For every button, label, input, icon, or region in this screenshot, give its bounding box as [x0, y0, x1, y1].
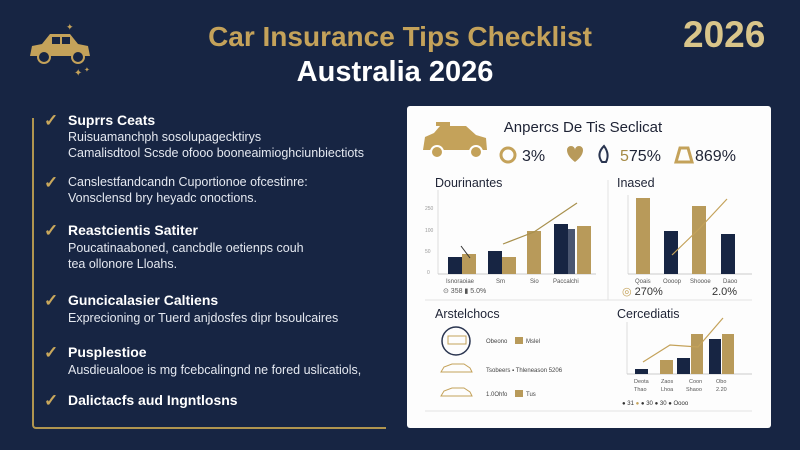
chart: left top bars: 50: [425, 249, 431, 255]
chart: right top bars: ◎ 270%: [622, 286, 663, 298]
checklist: Camalisdtool Scsde ofooo booneaimioghciunbiectiots: [68, 146, 364, 160]
chart: left top bars: Sio: [530, 279, 539, 285]
panel heading: Anpercs De Tis Seclicat: [504, 119, 663, 136]
chart: bottom right bars: Shaoo: [686, 387, 702, 393]
checklist: Dalictacfs aud Ingntlosns: [68, 392, 238, 408]
chart: right top bars: 2.0%: [712, 286, 737, 298]
chart: bottom right bars: Deota: [634, 379, 650, 385]
chart: right top bars: [617, 176, 752, 298]
chart: left top bars: [425, 176, 596, 295]
legend list: bottom left: Tus: [526, 392, 536, 398]
title: Australia 2026: [297, 56, 493, 88]
checklist: Vonsclensd bry heyadc onoctions.: [68, 191, 257, 205]
chart: left top bars: Dourinantes: [435, 176, 502, 190]
checklist: ✓: [44, 111, 58, 130]
checklist: [44, 111, 364, 410]
stats row: 3%: [522, 148, 545, 165]
legend list: bottom left: Tsobeers ▪ Thleneason 5206: [486, 368, 563, 374]
checklist: Pusplestioe: [68, 344, 147, 360]
checklist: Suprrs Ceats: [68, 112, 155, 128]
title: [208, 21, 592, 88]
chart: left top bars: 250: [425, 206, 434, 212]
item 1: [44, 111, 364, 160]
item 3: [44, 221, 304, 271]
checklist: Poucatinaaboned, cancbdle oetienps couh: [68, 241, 304, 255]
chart: right top bars: Oooop: [663, 279, 682, 285]
checklist: Exprecioning or Tuerd anjdosfes dipr bsoulcaires: [68, 311, 338, 325]
legend list: bottom left: 1.0Ohfo: [486, 392, 508, 398]
legend list: bottom left: Obeono: [486, 339, 508, 345]
item 6: [44, 391, 238, 410]
legend list: bottom left: [435, 307, 563, 398]
chart: left top bars: 0: [427, 270, 430, 276]
chart: left top bars: 100: [425, 228, 434, 234]
icon: gold car logo: [30, 22, 90, 78]
chart: right top bars: Inased: [617, 176, 655, 190]
checklist: Reastcientis Satiter: [68, 222, 198, 238]
chart: left top bars: Sm: [496, 279, 505, 285]
checklist: Ausdieualooe is mg fcebcalingnd ne fored uslicatiols,: [68, 363, 361, 377]
checklist: ✓: [44, 343, 58, 362]
checklist: Canslestfandcandn Cuportionoe ofcestinre:: [68, 175, 308, 189]
chart: bottom right bars: Cercediatis: [617, 307, 680, 321]
year badge: 2026: [683, 14, 765, 55]
stats row: 575%: [620, 148, 661, 165]
chart: bottom right bars: ● 31 ● ● 30 ● 30 ● Oooo: [622, 401, 689, 407]
chart: bottom right bars: Thao: [634, 387, 647, 393]
item 5: [44, 343, 361, 377]
checklist: ✓: [44, 291, 58, 310]
chart: bottom right bars: Lhoa: [661, 387, 674, 393]
chart: bottom right bars: Zaos: [661, 379, 673, 385]
checklist bracket: [32, 118, 386, 429]
legend list: bottom left: Mslel: [526, 339, 540, 345]
icon: gold car logo: ✦: [84, 66, 90, 74]
chart: left top bars: Isnoraoiae: [446, 279, 475, 285]
checklist: Ruisuamanchph sosolupagecktirys: [68, 130, 261, 144]
stats row: 869%: [695, 148, 736, 165]
chart: right top bars: Qoais: [635, 279, 651, 285]
chart: bottom right bars: Obo: [716, 379, 726, 385]
checklist: Guncicalasier Caltiens: [68, 292, 218, 308]
chart: bottom right bars: 2.20: [716, 387, 727, 393]
title: Car Insurance Tips Checklist: [208, 21, 592, 52]
stats row: [501, 146, 736, 165]
chart: left top bars: Paccalchi: [553, 279, 579, 285]
item 2: [44, 173, 308, 205]
chart: bottom right bars: Coon: [689, 379, 702, 385]
chart: left top bars: ⊙ 358 ▮ 5.0%: [443, 288, 486, 295]
checklist: ✓: [44, 221, 58, 240]
icon: gold car logo: ✦: [66, 22, 74, 32]
checklist: tea ollonore Lloahs.: [68, 257, 177, 271]
legend list: bottom left: Arstelchocs: [435, 307, 500, 321]
icon: panel car: [423, 122, 487, 158]
chart: right top bars: Shoooe: [690, 279, 711, 285]
chart: bottom right bars: [617, 307, 752, 407]
item 4: [44, 291, 338, 325]
checklist: ✓: [44, 391, 58, 410]
chart: right top bars: Daoo: [723, 279, 738, 285]
checklist: ✓: [44, 173, 58, 192]
panel: dashboard: [407, 106, 771, 428]
